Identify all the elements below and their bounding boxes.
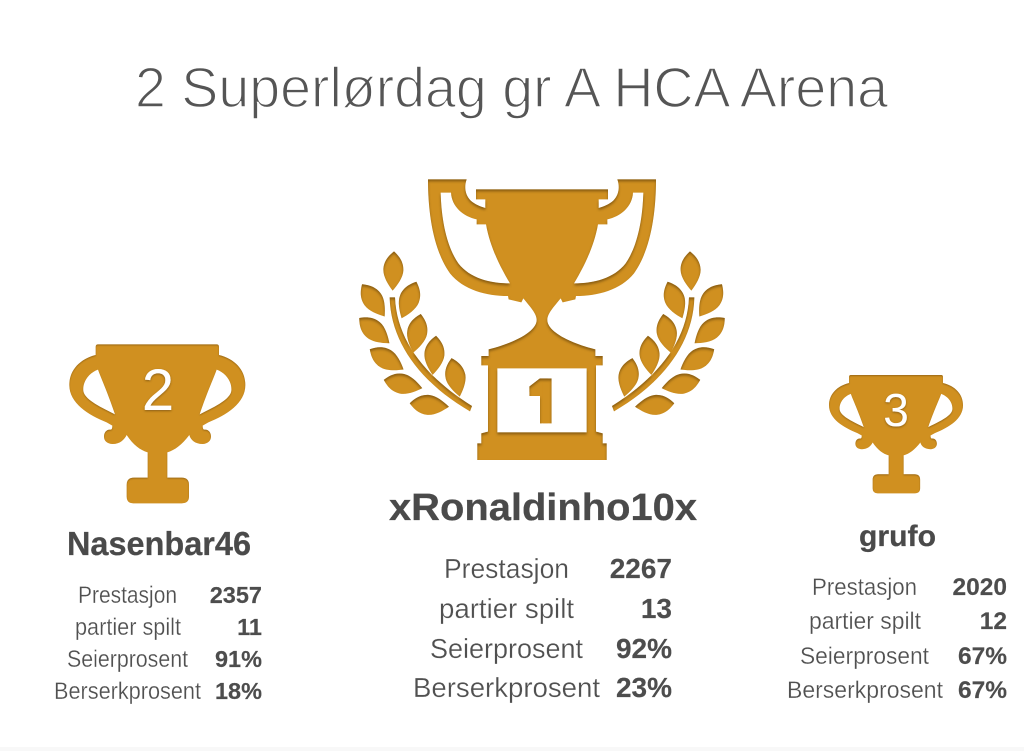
stats: third place: 12 [980, 608, 1007, 635]
number 3: 3 [883, 384, 909, 436]
panel: third place [787, 375, 1007, 704]
stats: third place: Berserkprosent [787, 677, 943, 704]
stats: first place: 23% [616, 672, 672, 703]
stats: third place: 67% [958, 677, 1007, 704]
stats: second place: 2357 [210, 582, 262, 608]
player name: xRonaldinho10x: xRonaldinho10x [389, 487, 697, 529]
icon: first place trophy with laurels: 1 [519, 363, 562, 448]
player name: Nasenbar46: Nasenbar46 [67, 525, 251, 562]
stats: third place: partier spilt [809, 608, 921, 635]
stats: first place: Berserkprosent [413, 672, 600, 703]
stats: third place: Seierprosent [800, 643, 929, 670]
stats: second place: Prestasjon [78, 582, 177, 609]
stats: second place: Seierprosent [67, 646, 188, 673]
stats: second place: 11 [237, 614, 262, 640]
stats: second place: 91% [215, 646, 262, 672]
icon: second place trophy [69, 344, 245, 503]
stats: third place: Prestasjon [812, 574, 917, 601]
stats: third place [787, 574, 1007, 704]
icon: third place trophy [829, 375, 963, 493]
stats: second place: 18% [215, 678, 262, 704]
stats: first place: 92% [616, 633, 672, 664]
panel: second place [54, 344, 262, 705]
panel: first place [353, 179, 731, 703]
stats: first place: Seierprosent [430, 633, 583, 664]
stats: third place: 67% [958, 643, 1007, 670]
number 2: 2 [142, 358, 174, 423]
stats: first place: Prestasjon [444, 553, 569, 584]
stats: second place: partier spilt [75, 614, 181, 641]
stats: first place [413, 553, 672, 703]
stats: second place: Berserkprosent [54, 678, 201, 705]
stats: third place: 2020 [952, 574, 1007, 601]
stats: first place: partier spilt [439, 593, 574, 624]
stats: first place: 13 [641, 593, 672, 624]
bottom edge strip [0, 747, 1024, 751]
title: 2 Superlørdag gr A HCA Arena [135, 56, 888, 120]
stats: second place [54, 582, 262, 705]
stats: first place: 2267 [610, 553, 672, 584]
icon: first place trophy with laurels [353, 179, 731, 460]
player name: grufo: grufo [859, 520, 936, 553]
